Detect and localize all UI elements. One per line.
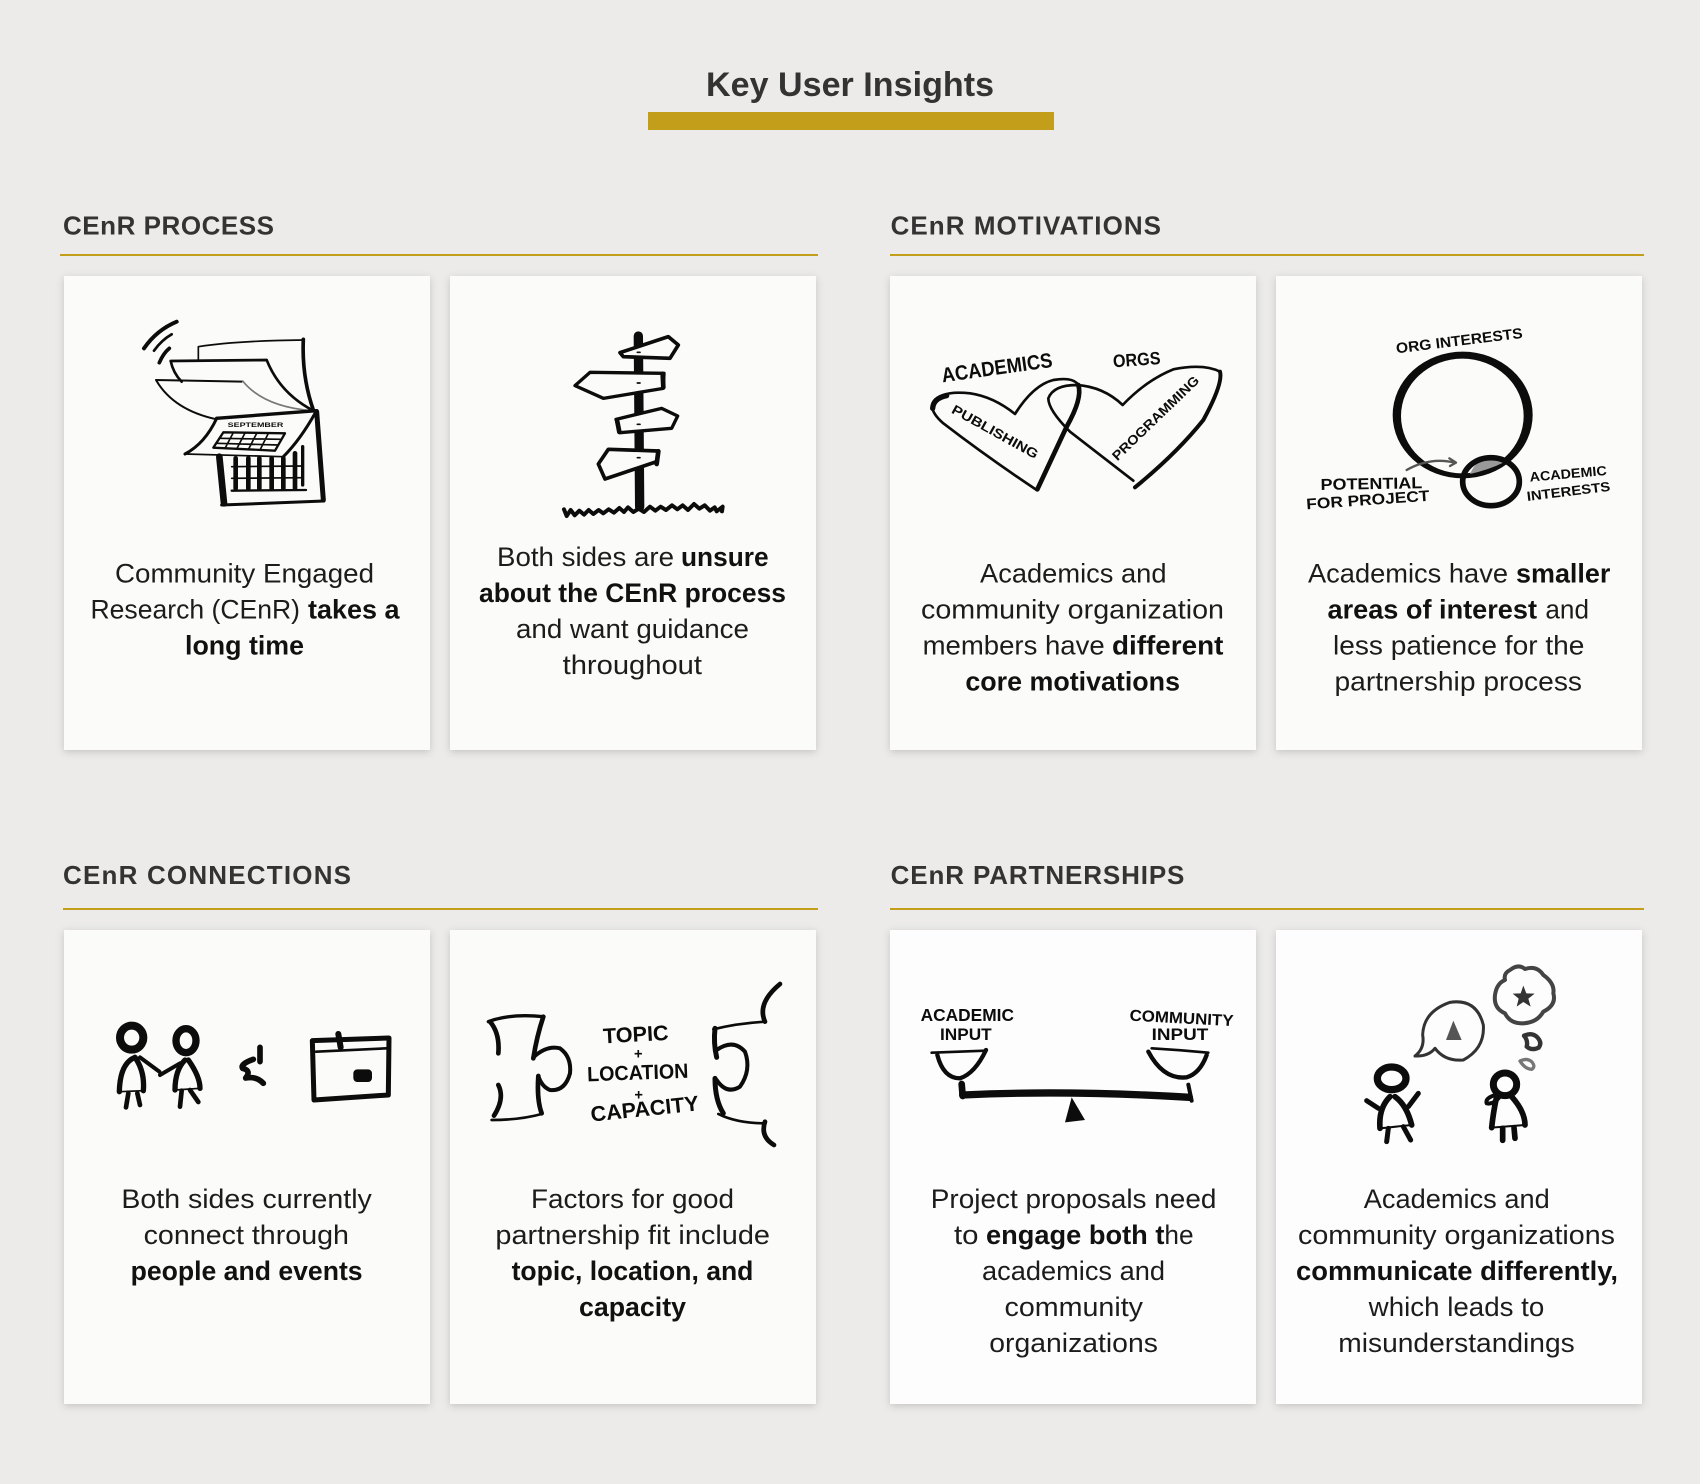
icon: overlapping hearts [932,348,1220,490]
icon: calendar with flipping pages [144,322,324,505]
text block: he [1164,1220,1194,1250]
text block: about the CEnR process [479,578,786,608]
text block: members have [923,630,1105,660]
text block: takes a [308,594,400,624]
title [648,66,1054,130]
title: Key User Insights [706,66,994,104]
text block: Community Engaged [115,558,374,588]
icon: overlapping hearts: PUBLISHING [949,402,1041,462]
text block [1296,1184,1618,1358]
icon: balance scale: ACADEMIC [921,1005,1014,1025]
text block [1308,558,1610,696]
icon: overlapping interest circles: ACADEMIC [1529,463,1608,485]
icon: two people with speech and thought bubbles [1367,966,1554,1142]
text block: Academics and [1364,1184,1550,1214]
text block: connect through [144,1220,349,1250]
panel: factors for partnership fit [450,930,816,1404]
heading: CEnR connections: CEnR CONNECTIONS [63,860,351,890]
icon: two people and a calendar [119,1026,389,1107]
icon: overlapping interest circles: FOR PROJECT [1306,488,1431,513]
text block: Academics have [1308,558,1508,588]
heading: CEnR process: CEnR PROCESS [63,210,274,240]
text block: misunderstandings [1338,1328,1575,1358]
text block: to [954,1220,978,1250]
text block: and [1545,594,1589,624]
icon: puzzle pieces: + [634,1087,643,1103]
text block: smaller [1516,558,1610,588]
text block [479,542,786,680]
section: CEnR motivations [890,210,1644,750]
panel: unsure about the process [450,276,816,750]
text block [121,1184,373,1286]
icon: overlapping interest circles: INTERESTS [1526,479,1611,504]
icon: puzzle pieces: LOCATION [587,1060,689,1086]
text block: which leads to [1368,1292,1544,1322]
icon: puzzle pieces: TOPIC [602,1021,669,1048]
text block: less patience for the [1333,630,1584,660]
icon: overlapping hearts: ACADEMICS [940,349,1054,387]
text block: community organization [921,594,1224,624]
icon: calendar with flipping pages: SEPTEMBER [228,422,284,429]
text block: partnership fit include [495,1220,770,1250]
text block: areas of interest [1328,594,1537,624]
text block: throughout [563,650,703,680]
section: CEnR process [60,210,818,750]
panel: different core motivations [890,276,1256,750]
icon: puzzle pieces: CAPACITY [589,1091,700,1127]
text block: capacity [579,1292,686,1322]
text block: organizations [989,1328,1158,1358]
section: CEnR partnerships [890,860,1644,1404]
icon: puzzle pieces: + [634,1047,643,1063]
text block: long time [185,630,304,660]
panel: people and events [64,930,430,1404]
icon: balance scale: INPUT [1152,1025,1208,1044]
text block [495,1184,770,1322]
heading: CEnR partnerships: CEnR PARTNERSHIPS [891,860,1184,890]
icon: overlapping hearts: ORGS [1112,348,1161,371]
text block [90,558,400,660]
panel: engage both sides [890,930,1256,1404]
text block: Factors for good [531,1184,734,1214]
text block [931,1184,1216,1358]
icon: balance scale: COMMUNITY [1129,1008,1234,1030]
section: CEnR connections [63,860,818,1404]
panel: smaller areas of interest [1276,276,1642,750]
icon: balance scale [921,1005,1234,1122]
heading: CEnR motivations: CEnR MOTIVATIONS [891,210,1161,240]
text block: topic, location, and [512,1256,753,1286]
icon: overlapping interest circles [1306,326,1611,513]
text block: Project proposals need [931,1184,1216,1214]
icon: balance scale: INPUT [940,1025,992,1044]
icon: signpost [564,336,723,516]
icon: overlapping interest circles: ORG INTERESTS [1395,326,1524,357]
text block: Both sides currently [121,1184,373,1214]
text block: and want guidance [516,614,749,644]
text block: different [1112,630,1224,660]
text block: academics and [982,1256,1165,1286]
panel: takes a long time [64,276,430,750]
text block: community organizations [1298,1220,1615,1250]
text block: people and events [131,1256,363,1286]
text block: partnership process [1334,666,1582,696]
text block: unsure [681,542,769,572]
text block [921,558,1224,696]
text block: Academics and [980,558,1166,588]
text block: engage both t [986,1220,1165,1250]
panel: communicate differently [1276,930,1642,1404]
text block: Research (CEnR) [90,594,300,624]
text block: core motivations [965,666,1180,696]
icon: overlapping hearts: PROGRAMMING [1109,373,1202,463]
icon: overlapping interest circles: POTENTIAL [1320,475,1423,494]
text block: Both sides are [497,542,674,572]
text block: community [1004,1292,1144,1322]
icon: puzzle pieces [488,984,780,1145]
text block: communicate differently, [1296,1256,1618,1286]
